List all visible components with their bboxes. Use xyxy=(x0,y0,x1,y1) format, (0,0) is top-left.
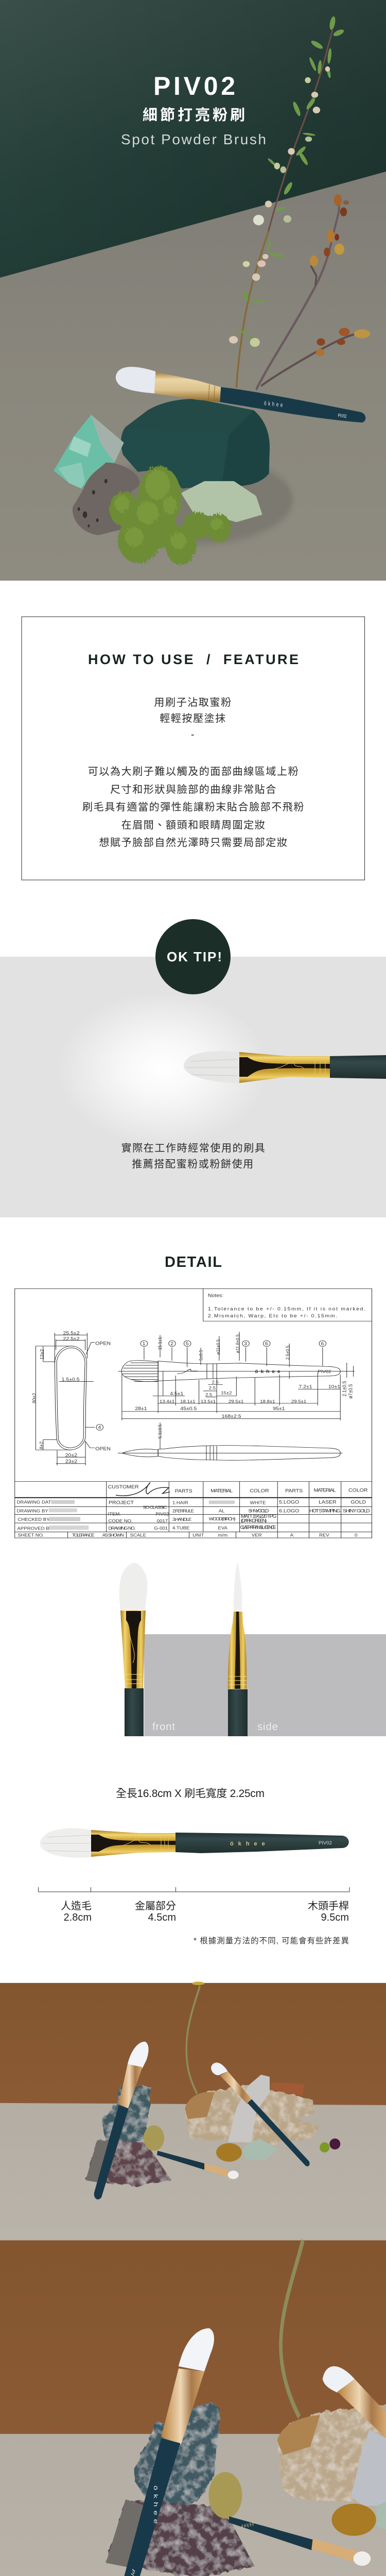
tip text: 推薦搭配蜜粉或粉餅使用 xyxy=(132,1158,254,1170)
panel: lifestyle photo 1 xyxy=(0,1981,386,2240)
brush: front view xyxy=(119,1563,147,1736)
title block table: PARTS xyxy=(175,1489,192,1494)
title block table: MATERIAL xyxy=(314,1488,336,1493)
size caption: 全長16.8cm X 刷毛寬度 2.25cm xyxy=(116,1788,265,1800)
drawing: brush front view with dimensions: 2.5 xyxy=(212,1380,219,1384)
panel: OK tip band xyxy=(0,919,386,1217)
drawing: brush front view with dimensions: 2.1±0.5 xyxy=(342,1381,347,1397)
brush close-up xyxy=(184,1051,386,1083)
small eye brush xyxy=(229,2516,371,2566)
drawing: brush side view xyxy=(118,1422,342,1460)
title block table: EVA xyxy=(218,1526,227,1530)
drawing: brush front view with dimensions: 13.4±1 xyxy=(160,1399,174,1404)
text block: usage and features: 刷毛具有適當的彈性能讓粉末貼合臉部不飛粉 xyxy=(82,801,305,813)
brush: side view xyxy=(228,1563,248,1736)
title block table: SHINY GOLD xyxy=(343,1509,370,1514)
title block table: 0017 xyxy=(157,1518,168,1523)
panel: technical drawing xyxy=(15,1289,372,1538)
drawing: brush front view with dimensions: 6 xyxy=(265,1342,268,1347)
title block table: PARTS xyxy=(285,1488,303,1494)
drawing: brush front view with dimensions: 6 xyxy=(321,1342,324,1347)
title block table: 1.HAIR xyxy=(172,1500,188,1505)
small eye brush xyxy=(157,2151,239,2179)
drawing: brush front view with dimensions: 13.5±1 xyxy=(201,1399,216,1404)
drawing: brush side view: 5.3±0.5 xyxy=(157,1425,163,1438)
drawing: brush front view with dimensions: 7.2±1 xyxy=(299,1384,312,1389)
panel: how to use / feature box xyxy=(22,617,364,880)
title block table: 4.TUBE xyxy=(172,1526,189,1530)
dimension labels: 木頭手桿 xyxy=(308,1900,349,1912)
drawing: brush front view with dimensions: ø11.8±0.5 xyxy=(235,1334,240,1353)
drawing: brush front view with dimensions: 4.5±1 xyxy=(170,1392,183,1397)
large brush leaning on stones: ökhee xyxy=(152,2485,159,2528)
title block table: CUSTOMER xyxy=(108,1484,139,1490)
text block: usage and features: 輕輕按壓塗抹 xyxy=(160,713,226,724)
hero subtitle English: Spot Powder Brush xyxy=(121,131,266,147)
label: front: front xyxy=(152,1721,176,1733)
branch with leaves and blossoms xyxy=(229,15,344,388)
hero brush: ökhee xyxy=(264,400,285,409)
title block table: COLOR xyxy=(250,1488,269,1494)
large brush leaning on stones xyxy=(120,2328,214,2576)
title block table: A xyxy=(290,1533,293,1537)
title block table xyxy=(15,1482,372,1538)
title block table: G-001 xyxy=(154,1526,168,1531)
pale green stone xyxy=(181,481,262,522)
drawing: ferrule flat pattern: 25.5±2 xyxy=(63,1331,80,1336)
title block table: UNIT xyxy=(192,1533,204,1537)
drawing: brush front view with dimensions: 18.1±1 xyxy=(180,1399,195,1404)
title block table: SCALE xyxy=(130,1533,146,1537)
drawing: ferrule flat pattern: 22.5±2 xyxy=(63,1336,80,1342)
dimension labels: 4.5cm xyxy=(148,1912,176,1923)
large brush leaning on stones xyxy=(94,2042,149,2199)
dimension labels: 金屬部分 xyxy=(135,1900,176,1912)
green floral foam block xyxy=(121,399,270,488)
moss cluster xyxy=(109,466,231,565)
driftwood and mineral xyxy=(277,2404,386,2506)
brush with full dimensions: ökhee xyxy=(230,1841,270,1847)
hero brush: PIV02 xyxy=(338,413,347,419)
title block table: CHECKED BY xyxy=(17,1517,50,1522)
title block table: AL xyxy=(219,1509,225,1513)
text block: usage and features xyxy=(82,697,305,849)
title block table: REV xyxy=(319,1533,329,1537)
title block table: TOLERANCE xyxy=(72,1533,95,1537)
title block table: GOLD xyxy=(350,1500,366,1505)
panel: front and side brush views xyxy=(119,1563,386,1736)
hero objects drawn in scaled coordinates xyxy=(54,15,370,565)
hero background: dark green wall and taupe table xyxy=(0,0,386,581)
drawing: brush front view with dimensions: 5±0.5 xyxy=(198,1350,203,1361)
text block: usage and features: 用刷子沾取蜜粉 xyxy=(154,697,232,708)
title block table: VER xyxy=(252,1533,262,1537)
dimension labels xyxy=(61,1900,349,1923)
drawing: ferrule flat pattern: OPEN xyxy=(95,1341,111,1346)
small eye brush: ökhee xyxy=(240,2521,254,2530)
drawing: ferrule flat pattern: 8±2 xyxy=(39,1442,45,1449)
text block: usage and features: 尺寸和形狀與臉部的曲線非常貼合 xyxy=(110,784,277,795)
drawing: ferrule flat pattern: 1.5±0.5 xyxy=(62,1377,80,1382)
title block table: CODE NO. xyxy=(109,1518,133,1523)
drawing: brush front view with dimensions: 15.1±1 xyxy=(157,1337,163,1350)
heading: detail: DETAIL xyxy=(165,1254,222,1270)
text block: usage and features: 想賦予臉部自然光澤時只需要局部定妝 xyxy=(99,837,288,849)
hero subtitle Chinese: 細節打亮粉刷 xyxy=(143,107,245,124)
title block table: 0 xyxy=(355,1533,357,1537)
driftwood and minerals xyxy=(185,2075,340,2162)
background wall and table xyxy=(0,1983,386,2240)
label: side: side xyxy=(257,1721,278,1733)
drawing: brush front view with dimensions xyxy=(118,1332,355,1420)
title block table: CLAER+TRANSLUCENCE xyxy=(240,1525,276,1530)
drawing: brush front view with dimensions: 95±1 xyxy=(273,1406,285,1412)
drawing: brush front view with dimensions: 168±2.5 xyxy=(222,1414,241,1419)
stacked stones xyxy=(106,2402,255,2576)
dimension labels: 人造毛 xyxy=(61,1900,92,1912)
drawing: brush front view with dimensions: 45±0.5 xyxy=(180,1406,197,1412)
dimension labels: 9.5cm xyxy=(321,1912,349,1923)
bare twig with orange buds xyxy=(256,194,370,389)
drawing: ferrule flat pattern xyxy=(31,1331,111,1465)
drawing: brush front view with dimensions: 28±1 xyxy=(135,1406,147,1412)
flower stem xyxy=(186,1981,204,2094)
dimension bracket xyxy=(38,1887,349,1892)
gold pebble and pale crystal xyxy=(332,2502,386,2536)
drawing: ferrule flat pattern: OPEN xyxy=(95,1447,111,1452)
title block table: AS SHOWN xyxy=(102,1533,124,1537)
drawing: brush front view with dimensions: PIV02 xyxy=(318,1369,331,1374)
drawing: brush front view with dimensions: 1 xyxy=(143,1342,145,1347)
stacked stones xyxy=(86,2085,172,2186)
title block table: 2.FERRULE xyxy=(172,1509,194,1513)
drawing: brush front view with dimensions: 18.8±1 xyxy=(260,1399,275,1404)
brush with full dimensions xyxy=(40,1828,349,1858)
badge: OK TIP xyxy=(155,919,231,994)
drawing: brush front view with dimensions: ø7±0.5 xyxy=(348,1384,354,1399)
drawing: ferrule flat pattern: 4 xyxy=(98,1425,101,1430)
drawing: ferrule flat pattern: 12±2 xyxy=(40,1349,45,1360)
dimension labels: 2.8cm xyxy=(64,1912,92,1923)
drawing: brush front view with dimensions: 29.5±1 xyxy=(291,1399,306,1404)
drawing: brush front view with dimensions: 29.5±1 xyxy=(229,1399,243,1404)
drawing: brush front view with dimensions: ø11±0.5 xyxy=(215,1340,221,1354)
drawing: brush front view with dimensions: ökhee xyxy=(255,1369,283,1375)
title block table: DRAWING DATE xyxy=(17,1500,55,1505)
drawing: ferrule flat pattern: 23±2 xyxy=(65,1459,77,1464)
title block table: SHEET NO. xyxy=(17,1533,44,1537)
title block table: APPROVED BY xyxy=(17,1526,52,1531)
drawing: brush front view with dimensions: 10±1 xyxy=(328,1384,340,1389)
text block: usage and features: - xyxy=(191,729,195,740)
heading: how to use / feature: HOW TO USE / FEATURE xyxy=(88,652,299,667)
title block table: PROJECT xyxy=(109,1500,134,1505)
title block table: LASER xyxy=(319,1500,337,1505)
drawing: brush front view with dimensions: 3 xyxy=(244,1342,248,1347)
title block table: SO CLASSIC xyxy=(143,1505,167,1510)
radial glow behind brush xyxy=(51,992,278,1151)
tip text: 實際在工作時經常使用的刷具 xyxy=(121,1142,266,1154)
brush on driftwood xyxy=(211,2063,310,2166)
title block table: ITEM. xyxy=(108,1512,121,1516)
drawing: brush front view with dimensions: 5 xyxy=(186,1342,189,1347)
title block table: m/m xyxy=(218,1533,227,1537)
title block table: 3.HANDLE xyxy=(172,1517,191,1522)
hero brush xyxy=(116,367,365,422)
drawing: ferrule flat pattern: 20±2 xyxy=(65,1453,77,1458)
drawing: brush front view with dimensions: 2.5 xyxy=(209,1386,216,1391)
title block table: WOOD(BIRCH) xyxy=(209,1517,235,1521)
notes box: Notes: xyxy=(208,1293,223,1298)
title block table: DRAWING NO. xyxy=(109,1526,135,1531)
notes box xyxy=(203,1289,372,1321)
background wall and table xyxy=(0,2240,386,2576)
title block table: PIV02 xyxy=(155,1512,169,1516)
brush at right edge xyxy=(323,2366,386,2438)
badge: OK TIP: OK TIP! xyxy=(167,949,222,964)
hero title: PIV02: PIV02 xyxy=(153,72,235,100)
brush with full dimensions: PIV02 xyxy=(319,1840,332,1846)
title block table: MATERIAL xyxy=(210,1488,233,1494)
title block table: (DARK GREEN) xyxy=(241,1518,267,1523)
volcanic rock xyxy=(73,463,141,535)
drawing: ferrule flat pattern: 80±2 xyxy=(31,1393,38,1403)
title block table: DRAWING BY xyxy=(17,1509,48,1513)
aqua crystal xyxy=(54,415,124,488)
notes box: 2.Mismatch, Warp, Etc to be +/- 0.15mm. xyxy=(208,1313,337,1319)
notes box: 1.Tolerance to be +/- 0.15mm, If it is not marked. xyxy=(208,1307,365,1312)
drawing: brush front view with dimensions: 2.5 xyxy=(205,1393,212,1397)
shadow under objects xyxy=(96,455,293,545)
panel: hero photograph xyxy=(0,0,386,581)
footnote: * 根據測量方法的不同, 可能會有些許差異 xyxy=(194,1936,349,1945)
text block: usage and features: 在眉間、額頭和眼睛周圍定妝 xyxy=(121,819,266,831)
drawing: brush front view with dimensions: 2.5±0.5 xyxy=(285,1346,290,1360)
text block: usage and features: 可以為大刷子難以觸及的面部曲線區域上粉 xyxy=(88,766,299,777)
title block table: 6.LOGO xyxy=(279,1509,300,1514)
panel: lifestyle photo 2 xyxy=(0,2240,386,2576)
tip text xyxy=(121,1142,266,1170)
title block table: SHINY GOLD xyxy=(248,1509,269,1514)
title block table: WHITE xyxy=(250,1500,266,1505)
drawing: brush front view with dimensions: 15±2 xyxy=(221,1391,232,1395)
title block table: COLOR xyxy=(348,1488,367,1493)
drawing: brush front view with dimensions: 2 xyxy=(170,1342,173,1347)
title block table: MATT 19-5220 TPG xyxy=(241,1514,276,1519)
title block table: 5.LOGO xyxy=(279,1500,300,1505)
title block table: HOT STAMPING xyxy=(309,1509,341,1514)
flower stem xyxy=(280,2240,303,2417)
